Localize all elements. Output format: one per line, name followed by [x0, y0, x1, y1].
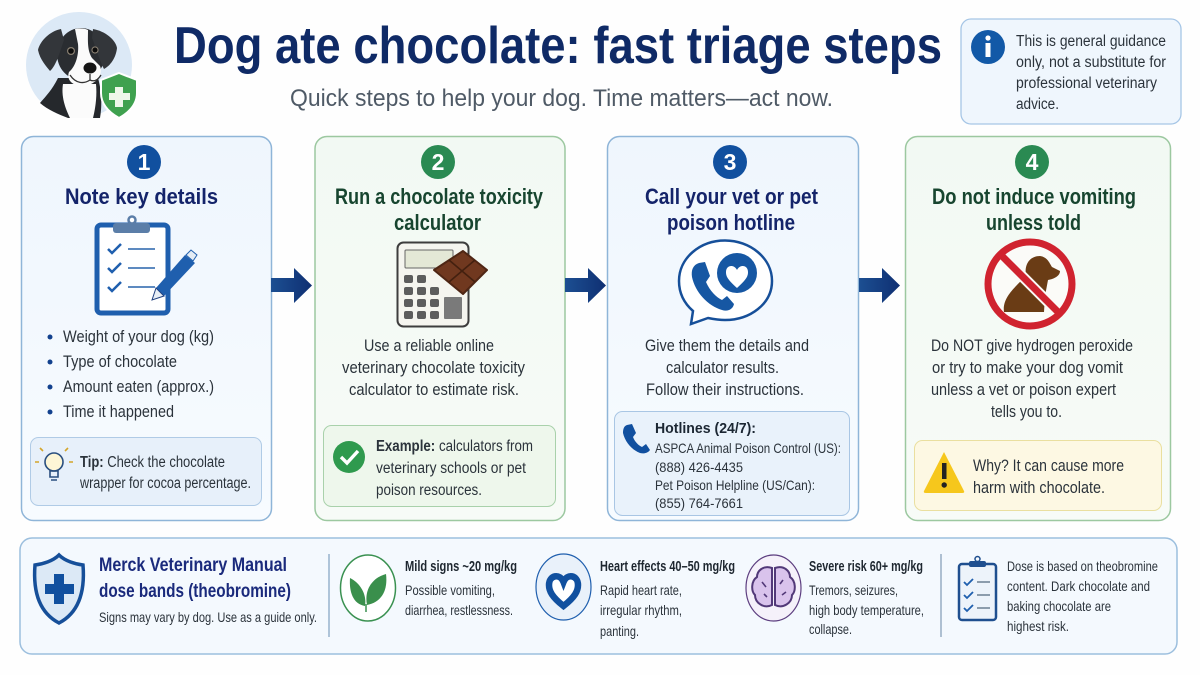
step 3 text [645, 337, 809, 399]
callout: why: Why? It can cause more [973, 457, 1124, 475]
panel: step 2 [315, 136, 565, 520]
note: dose basis: baking chocolate are [1007, 598, 1111, 614]
heading 1: Note key details [65, 184, 218, 209]
band: severe risk [809, 559, 924, 637]
callout: hotlines: Pet Poison Helpline (US/Can): [655, 477, 815, 493]
step 4 text: or try to make your dog vomit [932, 359, 1123, 377]
panel: dose bands [20, 538, 1177, 654]
checklist: Amount eaten (approx.) [63, 378, 214, 396]
step 3 text: Give them the details and [645, 337, 809, 355]
panel: step 4 [906, 136, 1170, 520]
disclaimer text: This is general guidance [1016, 33, 1166, 50]
heading 2 [335, 184, 543, 235]
arrow 3 to 4 [859, 268, 900, 303]
heading 3: Call your vet or pet [645, 184, 818, 209]
badge 4 [1015, 145, 1049, 179]
icon: clipboard and pen [97, 216, 197, 313]
band: mild signs: diarrhea, restlessness. [405, 602, 513, 618]
dose bands heading: Merck Veterinary Manual [99, 555, 287, 576]
heading 3: poison hotline [667, 210, 795, 235]
icon: calculator with chocolate [398, 242, 487, 326]
callout: why: harm with chocolate. [973, 479, 1105, 497]
heading 2: calculator [394, 210, 481, 235]
callout: example: poison resources. [376, 482, 482, 499]
badge 1: 1 [138, 149, 151, 175]
band: mild signs [405, 559, 517, 618]
step 2 text: calculator to estimate risk. [349, 381, 519, 399]
step 4 text: unless a vet or poison expert [931, 381, 1116, 399]
icon: heart [536, 554, 591, 620]
checklist [48, 328, 214, 421]
title: Dog ate chocolate: fast triage steps [174, 17, 942, 75]
icon: phone speech bubble [679, 240, 772, 324]
disclaimer text: professional veterinary [1016, 75, 1157, 92]
callout: example: Example: calculators from [376, 438, 533, 455]
icon: no dog [988, 242, 1072, 326]
step 3 text: calculator results. [666, 359, 779, 377]
badge 2 [421, 145, 455, 179]
callout: hotlines: ASPCA Animal Poison Control (US): [655, 440, 841, 456]
icon: check [333, 441, 365, 473]
step 2 text [342, 337, 526, 399]
panel: step 1 [22, 136, 272, 520]
band: severe risk: Tremors, seizures, [809, 582, 898, 598]
arrow 2 to 3 [565, 268, 606, 303]
callout: example [324, 426, 556, 506]
step 4 text: tells you to. [991, 403, 1062, 421]
icon: leaf [340, 555, 396, 621]
disclaimer text: advice. [1016, 96, 1059, 113]
heading 2: Run a chocolate toxicity [335, 184, 543, 209]
band: severe risk: Severe risk 60+ mg/kg [809, 559, 923, 575]
panel: disclaimer [961, 19, 1181, 124]
badge 2: 2 [432, 149, 444, 175]
dose bands heading [99, 555, 317, 625]
step 4 text: Do NOT give hydrogen peroxide [931, 337, 1133, 355]
callout: hotlines: Hotlines (24/7): [655, 421, 756, 437]
icon: dog with green shield [26, 12, 137, 118]
callout: hotlines: (855) 764-7661 [655, 495, 743, 511]
disclaimer text [1016, 33, 1166, 113]
step 3 text: Follow their instructions. [646, 381, 804, 399]
callout: hotlines [614, 412, 850, 516]
dose bands heading: Signs may vary by dog. Use as a guide only. [99, 609, 317, 625]
step 2 text: veterinary chocolate toxicity [342, 359, 526, 377]
step 2 text: Use a reliable online [364, 337, 494, 355]
badge 4: 4 [1026, 149, 1039, 175]
step 4 text [931, 337, 1133, 421]
band: severe risk: collapse. [809, 621, 852, 637]
callout: tip: Tip: Check the chocolate [80, 454, 225, 471]
icon: brain [746, 555, 801, 621]
subtitle: Quick steps to help your dog. Time matters—act now. [290, 85, 833, 112]
callout: tip: wrapper for cocoa percentage. [79, 475, 251, 492]
badge 3 [713, 145, 747, 179]
note: dose basis: Dose is based on theobromine [1007, 558, 1158, 574]
note: dose basis: highest risk. [1007, 618, 1069, 634]
callout: why [914, 440, 1162, 510]
icon: info [971, 30, 1005, 64]
dose bands heading: dose bands (theobromine) [99, 581, 291, 602]
band: heart effects: panting. [600, 623, 639, 639]
arrow 1 to 2 [271, 268, 312, 303]
band: mild signs: Mild signs ~20 mg/kg [405, 559, 517, 575]
panel: step 3 [608, 136, 858, 520]
checklist: Weight of your dog (kg) [63, 328, 214, 346]
callout: example: veterinary schools or pet [376, 460, 527, 477]
band: heart effects: Heart effects 40–50 mg/kg [600, 559, 735, 575]
heading 4 [932, 184, 1136, 235]
note: dose basis [1007, 558, 1158, 634]
band: heart effects [600, 559, 735, 639]
icon: shield [35, 555, 83, 623]
heading 4: unless told [986, 210, 1081, 235]
callout: tip [30, 438, 262, 506]
band: mild signs: Possible vomiting, [405, 582, 495, 598]
disclaimer text: only, not a substitute for [1016, 54, 1166, 71]
band: heart effects: irregular rhythm, [600, 602, 682, 618]
badge 1 [127, 145, 161, 179]
checklist: Type of chocolate [63, 353, 177, 371]
heading 3 [645, 184, 818, 235]
note: dose basis: content. Dark chocolate and [1007, 578, 1150, 594]
band: severe risk: high body temperature, [809, 602, 924, 618]
callout: hotlines: (888) 426-4435 [655, 459, 743, 475]
heading 4: Do not induce vomiting [932, 184, 1136, 209]
band: heart effects: Rapid heart rate, [600, 582, 682, 598]
icon: dose checklist [959, 556, 996, 620]
checklist: Time it happened [63, 403, 174, 421]
icon: warning [924, 452, 964, 493]
badge 3: 3 [724, 149, 736, 175]
icon: phone [623, 424, 650, 453]
icon: light bulb [35, 448, 73, 480]
